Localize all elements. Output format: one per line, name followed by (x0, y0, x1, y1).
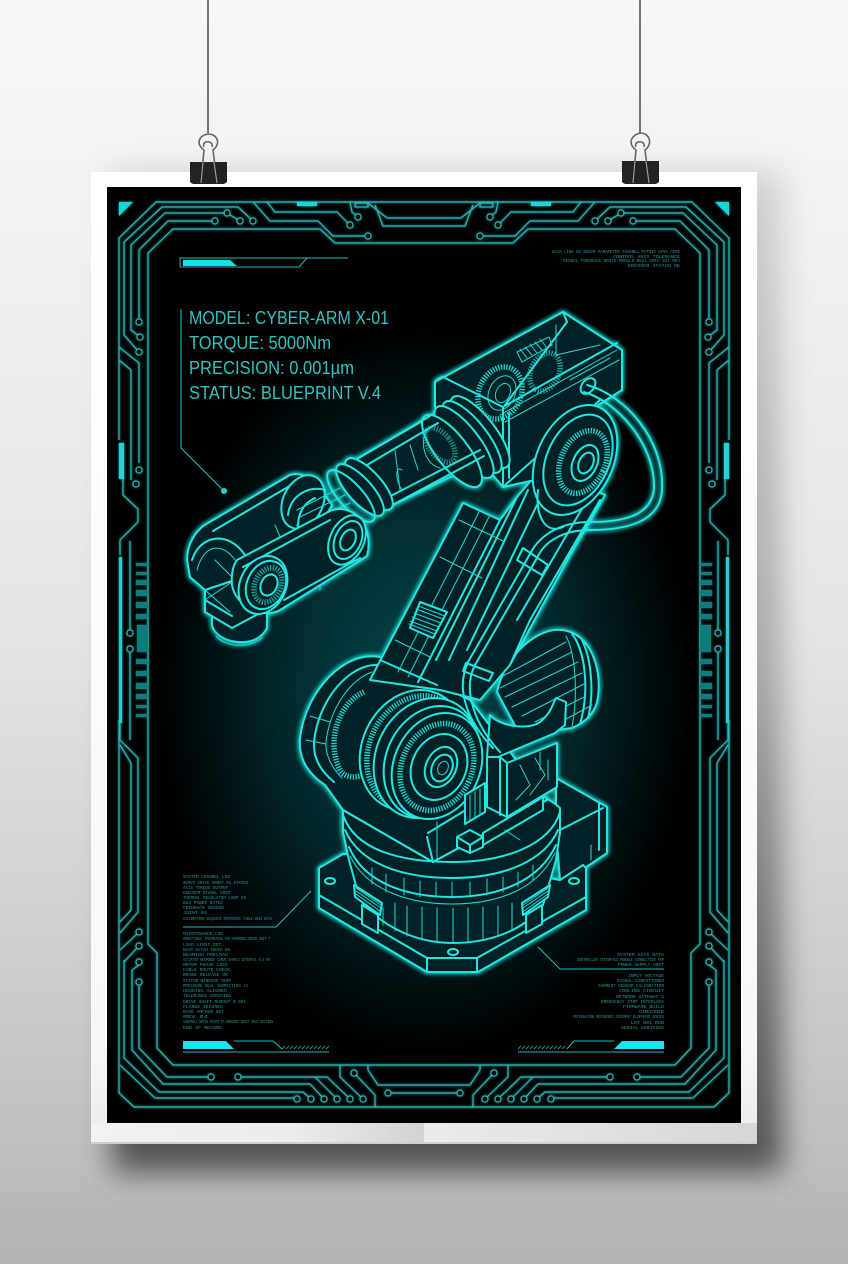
central teal glow (107, 187, 741, 1123)
robot: rear motor cylinder (497, 630, 599, 735)
robot: cable hose (463, 375, 662, 752)
robot: wrist fork and flange (187, 468, 350, 645)
left hanging wire (207, 0, 209, 133)
top-right micro text: CONTROL AXIS TOLERANCE (613, 254, 680, 260)
circuit frame (119, 202, 729, 1107)
lower-left leader line (183, 891, 311, 927)
lower-left micro text: TOLERANCE VERIFIED (183, 993, 231, 999)
top-right micro text: DATA LINK 01 SERVO PARAMETER CHANNEL MATRIX SYNC CORE (552, 249, 680, 255)
lower-left micro text: MOTOR PHASE LOCK (183, 962, 228, 968)
lower-right micro text: EMERGENCY STOP INTERLOCK (601, 999, 664, 1005)
lower-left micro text: BRAKE RELEASE OK (183, 972, 228, 978)
lower-left micro text: LOAD LIMIT SET (183, 942, 221, 948)
robot: cylindrical base rings and drum (343, 780, 560, 943)
robot: base clamps (354, 885, 550, 933)
lower-right micro text: CONTROLLER INTERFACE MODULE CONNECTION MAP (577, 957, 664, 963)
lower-right micro text: SERIAL VERIFIED (621, 1025, 664, 1031)
lower-left micro text: FLANGE SECURED (183, 1004, 223, 1010)
robot: front wrist link with pivots (229, 509, 373, 622)
lower-right micro text: LOT 001 RUN (631, 1020, 664, 1026)
lower-left micro text: BEARING PRELOAD (183, 952, 228, 958)
right binder clip (622, 133, 659, 184)
lower-left micro text: REV 04 (183, 1014, 208, 1020)
lower-right micro text (573, 952, 664, 1031)
spec text block: TORQUE: 5000Nm (189, 333, 331, 353)
lower-left micro text: STATOR WINDING TEMP (183, 978, 231, 984)
robot: forearm tube (320, 388, 519, 529)
robot: shoulder gear discs (340, 673, 499, 835)
lower-left micro text: FEEDBACK SENSOR (183, 905, 224, 911)
robot: elbow gear disc (516, 391, 634, 529)
lower-left micro text: HOUSING ALIGNED (183, 988, 227, 994)
lower-left micro text: CABLE ROUTE CHECK (183, 967, 230, 973)
lower-left micro text: OPERATIONAL PARAMETERS FOR HARMONIC DRIVE UNIT 7 (183, 936, 270, 942)
lower-left micro text (183, 874, 273, 1031)
lower-right micro text: FIRMWARE BUILD (623, 1004, 664, 1010)
robot: rear left shoulder disc (300, 656, 547, 862)
lower-left micro text: JOINT 04 (183, 910, 207, 916)
lower-left micro text: THERMAL REGULATOR LOOP V2 (183, 895, 246, 901)
left binder clip (190, 134, 227, 184)
spec text block: PRECISION: 0.001µm (189, 358, 354, 378)
callout leader with dot (181, 309, 227, 494)
lower-left micro text: ENCODER SIGNAL GRID (183, 890, 230, 896)
spec text block: MODEL: CYBER-ARM X-01 (189, 308, 389, 328)
lower-left micro text: END OF RECORD (183, 1025, 222, 1031)
lower-left progress bar (183, 1041, 329, 1052)
lower-right micro text: NETWORK GATEWAY 2 (616, 994, 664, 1000)
robot: elbow housing box (435, 312, 622, 487)
poster shadow (112, 172, 782, 1172)
top-right micro text: ENCODER STATUS OK (628, 263, 680, 269)
lower-right leader line (538, 947, 664, 969)
lower-left micro text: ASSEMBLY NOTES REFER TO DRAWING SHEET 0017 SECTION (183, 1019, 273, 1025)
lower-left micro text: PRESSURE SEAL INSPECTION 12 (183, 983, 248, 989)
robot: turret platform (343, 790, 547, 862)
lower-left micro text: GEAR RATIO INDEX 06 (183, 947, 230, 953)
lower-right micro text: CURRENT SENSOR CALIBRATION (598, 983, 664, 989)
lower-right micro text: INTEGRATION REFERENCE DOCUMENT BLUEPRINT SERIES (573, 1014, 664, 1020)
black blueprint panel (107, 187, 741, 1123)
lower-left micro text: CALIBRATION SEQUENCE REFERENCE TABLE 0042 DATA (183, 916, 272, 922)
frame: right half traces (424, 202, 729, 1107)
right hanging wire (639, 0, 641, 133)
lower-left micro text: SERVO DRIVE ARRAY 01 STATUS (183, 880, 248, 886)
top-right micro text: SIGNAL FEEDBACK ROUTE MODULE 0021 GRID 017 REV (563, 258, 680, 264)
lower-right micro text: POWER SUPPLY UNIT (618, 962, 664, 968)
lower-right progress bar (518, 1041, 664, 1052)
robot: base plate (319, 854, 586, 972)
robot: controller box and cradle (465, 698, 566, 824)
lower-left micro text: MAINTENANCE LOG (183, 931, 223, 937)
lower-right micro text: INPUT VOLTAGE (628, 973, 664, 979)
lower-right micro text: SIGNAL CONDITIONER (617, 978, 664, 984)
top-right micro text (552, 249, 680, 269)
lower-left micro text: BASE ANCHOR SET (183, 1009, 224, 1015)
spec text block: STATUS: BLUEPRINT V.4 (189, 383, 381, 403)
lower-left micro text: ACTUATOR RESPONSE CURVE SAMPLE INTERVAL 0.5 MS (183, 957, 270, 963)
spec text block (189, 308, 389, 403)
frame: left half traces (119, 202, 424, 1107)
robot: upper arm link (370, 470, 605, 700)
robot arm wireframe (187, 312, 662, 972)
lower-right micro text: COOLING CIRCUIT (619, 988, 664, 994)
lower-left micro text: AXIS TORQUE OUTPUT (183, 885, 228, 891)
lower-left micro text: SYSTEM CHANNEL LOG (183, 874, 230, 880)
top-left progress bar (180, 258, 348, 267)
lower-left micro text: DRIVE SHAFT RUNOUT 0.001 (183, 999, 246, 1005)
robot: rear cable box (556, 778, 607, 880)
lower-right micro text: CHECKED (639, 1009, 664, 1015)
lower-right micro text: SYSTEM AXIS DATA (617, 952, 664, 958)
lower-left micro text: BUS POWER RATED (183, 900, 223, 906)
white poster paper (91, 172, 757, 1144)
